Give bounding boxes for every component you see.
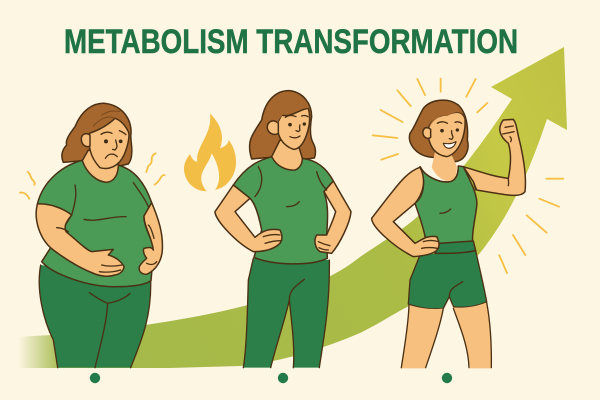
step marker 2 bbox=[278, 373, 288, 383]
step marker 1 bbox=[90, 373, 100, 383]
pants bbox=[243, 258, 329, 368]
pants seams bbox=[243, 258, 329, 368]
figure: middle, confident woman bbox=[215, 91, 351, 368]
figure: before, tired woman bbox=[20, 103, 165, 368]
energy rays bbox=[373, 79, 563, 273]
shorts seams bbox=[408, 251, 487, 309]
neck bbox=[432, 152, 457, 181]
shirt bbox=[233, 157, 333, 264]
shirt bbox=[37, 160, 154, 287]
left arm and hand bbox=[372, 167, 439, 257]
hair bbox=[62, 103, 132, 167]
shorts bbox=[408, 251, 487, 309]
brows and nose bbox=[437, 122, 462, 139]
left leg bbox=[401, 305, 443, 368]
ear bbox=[81, 134, 90, 147]
ear bbox=[423, 128, 431, 138]
eyes bbox=[440, 129, 444, 132]
sad face features bbox=[101, 131, 126, 158]
open smile bbox=[443, 142, 456, 148]
right leg bbox=[451, 302, 492, 368]
right leg outline bbox=[453, 302, 491, 368]
brows, nose, mouth bbox=[101, 131, 126, 158]
arrow tail fade bbox=[18, 330, 63, 368]
left leg outline bbox=[401, 305, 443, 368]
pants fill bbox=[39, 265, 151, 368]
discomfort squiggles bbox=[20, 153, 165, 199]
hair fringe bbox=[429, 105, 465, 127]
hair bbox=[409, 100, 468, 162]
figure: after, energetic woman bbox=[372, 79, 563, 368]
pants seams bbox=[39, 265, 151, 368]
shirt crease and arm lines bbox=[57, 183, 157, 272]
face bbox=[89, 118, 129, 168]
smiling face features bbox=[285, 115, 308, 138]
eyes bbox=[288, 123, 292, 126]
icon: flame bbox=[184, 113, 236, 191]
face bbox=[428, 112, 465, 157]
step marker 3 bbox=[442, 373, 452, 383]
tank top bbox=[415, 166, 477, 244]
neck bbox=[82, 150, 118, 182]
happy face features bbox=[437, 122, 462, 148]
waistband bbox=[435, 241, 476, 253]
right arm and hand bbox=[139, 203, 162, 274]
brows, nose, mouth bbox=[285, 115, 308, 138]
arm and fist lines bbox=[422, 126, 514, 248]
shirt creases and hand lines bbox=[255, 167, 330, 250]
neck bbox=[272, 140, 302, 170]
ear bbox=[267, 121, 278, 134]
right arm and hand bbox=[315, 181, 351, 253]
left arm and hand bbox=[215, 185, 282, 252]
hair fringe bbox=[277, 98, 308, 123]
hair strands bbox=[93, 111, 120, 126]
neck outline bbox=[421, 166, 458, 182]
eyes bbox=[104, 139, 108, 143]
face bbox=[277, 108, 310, 149]
left arm and hand bbox=[36, 204, 124, 276]
flexed arm and fist bbox=[463, 119, 525, 195]
upward growth arrow bbox=[18, 47, 567, 368]
hair bbox=[250, 91, 315, 160]
